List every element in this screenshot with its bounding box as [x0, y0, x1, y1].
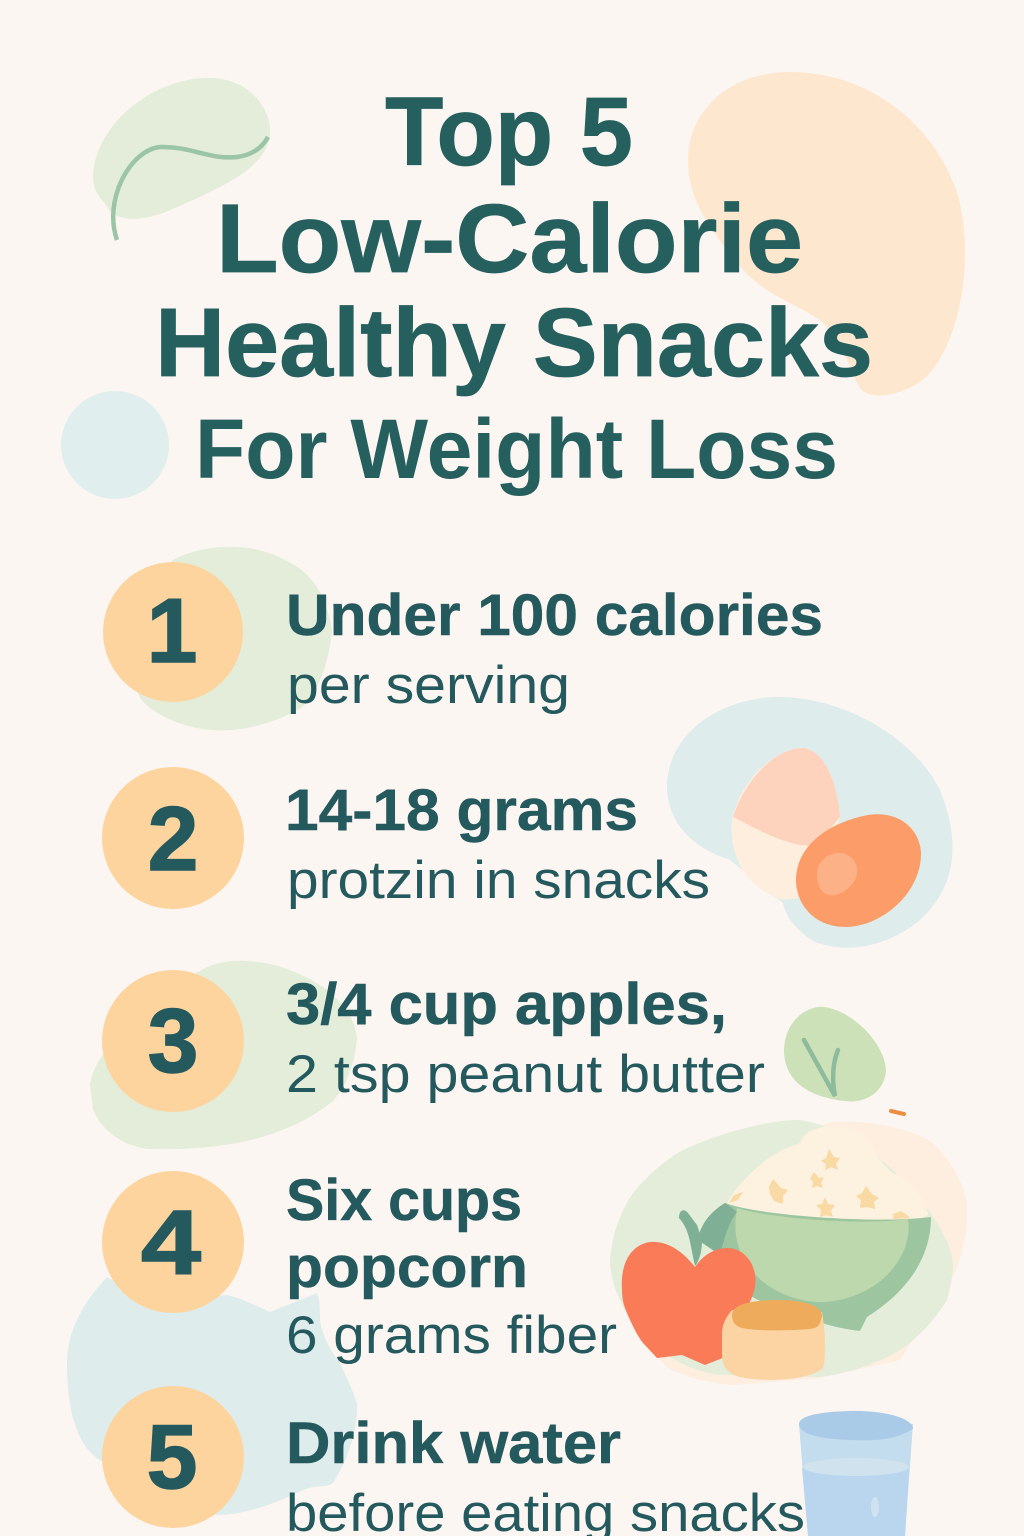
- item 1: per serving: [287, 656, 570, 715]
- item 3: 2 tsp peanut butter: [286, 1045, 765, 1104]
- icon: popcorn bowl, apple and jar: [610, 1120, 967, 1385]
- item 2: 14-18 grams: [285, 778, 638, 843]
- decorative blob: peach behind title: [688, 72, 965, 395]
- icon: small leaf: [784, 1007, 886, 1101]
- item 2: [102, 767, 710, 910]
- icon: eggs: [732, 748, 921, 927]
- decorative speck: [891, 1111, 904, 1114]
- item 4: popcorn: [286, 1235, 528, 1300]
- item 4: 4: [141, 1193, 201, 1294]
- item 4: 6 grams fiber: [286, 1306, 617, 1365]
- item 1: Under 100 calories: [286, 583, 823, 648]
- item 2: 2: [148, 789, 198, 890]
- title: Low-Calorie: [216, 184, 803, 293]
- item 5: Drink water: [286, 1411, 621, 1476]
- item 4: Six cups: [286, 1168, 522, 1233]
- decorative blob: blue circle: [61, 391, 169, 499]
- icon: title leaf: [93, 78, 270, 240]
- icon: glass of water: [799, 1411, 913, 1536]
- title: For Weight Loss: [195, 402, 838, 496]
- decorative blob: green behind item 1: [135, 547, 332, 730]
- title: Top 5: [385, 77, 633, 186]
- title: [155, 77, 873, 496]
- item 1: 1: [147, 581, 197, 682]
- item 3: 3: [148, 991, 198, 1092]
- item 4: [102, 1168, 617, 1365]
- item 3: [102, 970, 765, 1112]
- item 2: protzin in snacks: [287, 851, 710, 910]
- title: Healthy Snacks: [155, 288, 873, 397]
- item 1: [103, 562, 823, 715]
- decorative blob: green behind item 3: [90, 961, 357, 1149]
- decorative blob: blue behind item 2 with eggs: [667, 697, 953, 948]
- item 3: 3/4 cup apples,: [286, 972, 727, 1037]
- decorative blob: blue behind items 4 and 5: [67, 1277, 357, 1515]
- item 5: [102, 1386, 805, 1536]
- item 5: 5: [147, 1407, 197, 1508]
